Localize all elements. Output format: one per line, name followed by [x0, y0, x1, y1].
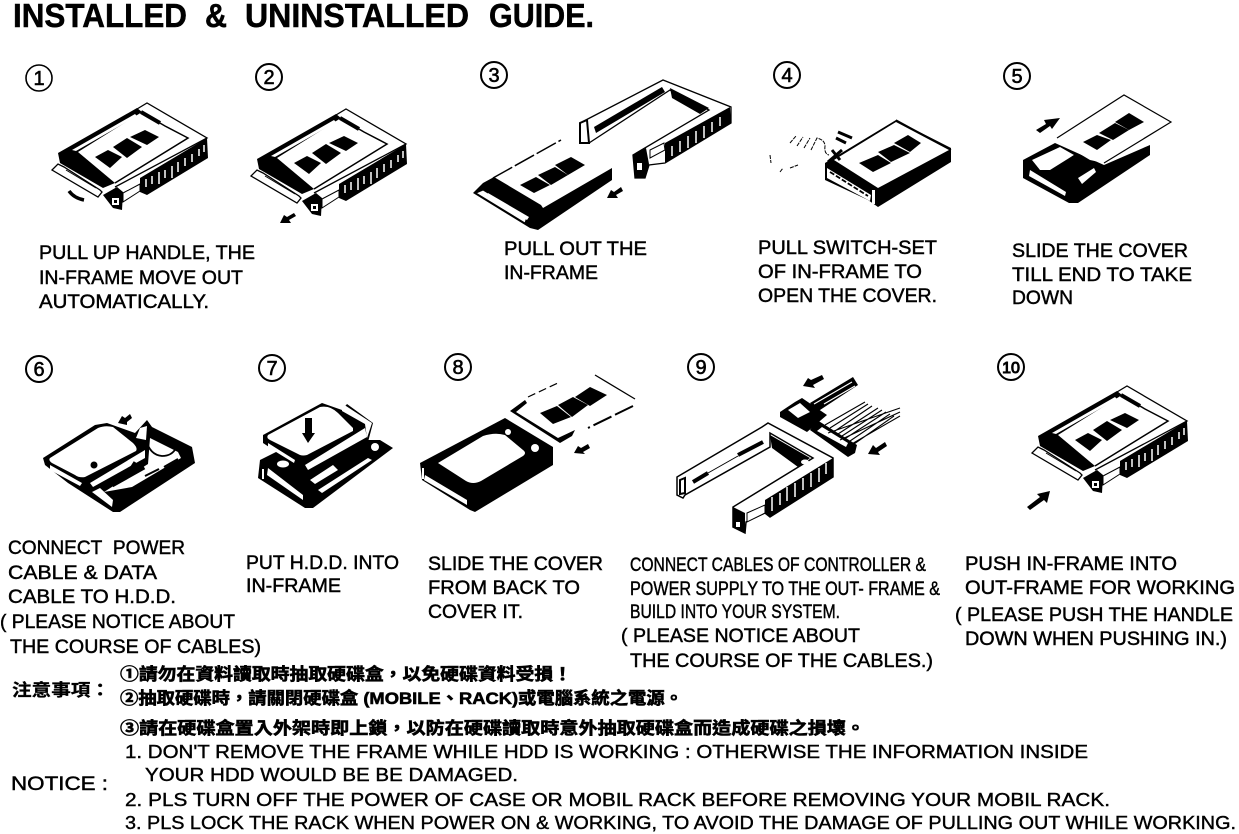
- caption: step 7: IN-FRAME: [246, 576, 341, 597]
- power connector: [780, 377, 858, 432]
- data ribbon: [810, 402, 900, 457]
- step 8 number: [445, 354, 471, 380]
- body: [1023, 143, 1150, 203]
- notice list: English: 3. PLS LOCK THE RACK WHEN POWER ON & WORKING, TO AVOID THE DAMAGE OF PULLING OUT WHILE WORKING.: [125, 813, 1236, 833]
- illustration: step 2 rack pulled out: [251, 109, 407, 223]
- arrow: down: [302, 418, 315, 443]
- caption: step 3: [504, 239, 647, 284]
- step 7 number: [259, 355, 285, 381]
- notice label: English: NOTICE :: [11, 774, 108, 795]
- caption: step 6: [0, 538, 261, 658]
- arrow: power cable: [803, 375, 824, 388]
- caption: step 10: DOWN WHEN PUSHING IN.): [965, 629, 1227, 650]
- illustration: step 8 slide cover back over HDD: [420, 375, 635, 512]
- arrow: slide: [574, 444, 590, 454]
- illustration: step 10 push in-frame into out-frame: [1027, 386, 1188, 510]
- caption: step 9: BUILD INTO YOUR SYSTEM.: [630, 602, 840, 623]
- caption: step 8: COVER IT.: [428, 602, 523, 623]
- caption: step 6: ( PLEASE NOTICE ABOUT: [0, 612, 235, 633]
- caption: step 3: IN-FRAME: [504, 263, 598, 284]
- cover: [1057, 95, 1171, 163]
- caption: step 8: SLIDE THE COVER: [428, 554, 603, 575]
- hand sketch: [770, 136, 829, 172]
- caption: step 10: [955, 554, 1235, 650]
- caption: step 1: [39, 243, 255, 313]
- arrow: handle curve: [69, 191, 84, 200]
- title: [13, 0, 594, 35]
- caption: step 8: [428, 554, 603, 623]
- illustration: step 4 cover opened with switch: [770, 120, 951, 207]
- notice list: English: 1. DON'T REMOVE THE FRAME WHILE HDD IS WORKING : OTHERWISE THE INFORMATION INSIDE: [125, 742, 1088, 762]
- caption: step 9: [621, 555, 940, 672]
- step 3 number: 3: [488, 65, 500, 87]
- caption: step 7: PUT H.D.D. INTO: [246, 553, 399, 574]
- caption: step 6: CABLE TO H.D.D.: [8, 587, 176, 608]
- step 1 number: [26, 65, 52, 91]
- notice list: English: 2. PLS TURN OFF THE POWER OF CASE OR MOBIL RACK BEFORE REMOVING YOUR MOBIL RACK.: [125, 790, 1110, 810]
- step 5 number: [1004, 63, 1030, 89]
- illustration: step 7 HDD into in-frame: [258, 403, 393, 508]
- caption: step 4: PULL SWITCH-SET: [758, 238, 937, 259]
- notice list: Chinese: [120, 664, 865, 738]
- illustration: step 9 cables and out-frame: [677, 375, 900, 533]
- illustration: step 5 cover sliding off: [1023, 95, 1171, 203]
- step 5 number: 5: [1011, 66, 1023, 88]
- caption: step 9: THE COURSE OF THE CABLES.): [630, 651, 933, 672]
- step 1 number: 1: [33, 68, 45, 90]
- caption: step 1: IN-FRAME MOVE OUT: [39, 268, 243, 289]
- arrow: pull out: [280, 213, 296, 223]
- caption: step 10: PUSH IN-FRAME INTO: [965, 554, 1177, 575]
- HDD in frame: [420, 418, 553, 512]
- caption: step 4: OPEN THE COVER.: [758, 286, 937, 307]
- arrow: data cable: [868, 442, 887, 455]
- caption: step 7: [246, 553, 399, 597]
- illustration: step 3 in-frame separated from out-frame: [473, 80, 731, 230]
- notice list: Chinese: ③請在硬碟盒置入外架時即上鎖，以防在硬碟讀取時意外抽取硬碟盒而造成硬碟之損壞。: [120, 718, 865, 738]
- caption: step 6: CABLE & DATA: [8, 563, 157, 584]
- notice list: English: YOUR HDD WOULD BE BE DAMAGED.: [145, 765, 518, 785]
- step 4 number: [774, 62, 800, 88]
- caption: step 10: OUT-FRAME FOR WORKING: [965, 578, 1235, 599]
- step 6 number: [26, 356, 52, 382]
- caption: step 1: AUTOMATICALLY.: [39, 292, 209, 313]
- caption: step 5: TILL END TO TAKE: [1012, 265, 1192, 286]
- caption: step 5: SLIDE THE COVER: [1012, 241, 1188, 262]
- illustration: step 1 rack with handle pulled up: [52, 103, 208, 210]
- step 2 number: 2: [263, 67, 275, 89]
- arrow: pull out in-frame: [607, 187, 623, 198]
- step 2 number: [256, 64, 282, 90]
- illustration: step 6 connect HDD cables: [43, 414, 195, 512]
- step 9 number: [688, 354, 714, 380]
- in-frame under HDD: [258, 440, 393, 508]
- caption: step 8: FROM BACK TO: [428, 578, 580, 599]
- arrow: push in: [1027, 491, 1050, 510]
- caption: step 6: THE COURSE OF CABLES): [10, 637, 261, 658]
- notice list: Chinese: ②抽取硬碟時，請關閉硬碟盒 (MOBILE、RACK)或電腦系統之電源。: [120, 688, 683, 708]
- step 6 number: 6: [33, 359, 45, 381]
- notice label: Chinese: 注意事項：: [12, 680, 110, 700]
- out-frame: [580, 80, 731, 178]
- out-frame: [677, 423, 833, 533]
- caption: step 9: ( PLEASE NOTICE ABOUT: [621, 626, 860, 647]
- HDD: [263, 403, 373, 472]
- caption: step 9: POWER SUPPLY TO THE OUT- FRAME &: [630, 579, 940, 600]
- step 10 number: 10: [1002, 360, 1020, 377]
- notice list: Chinese: ①請勿在資料讀取時抽取硬碟盒，以免硬碟資料受損！: [120, 664, 572, 684]
- caption: step 4: OF IN-FRAME TO: [758, 262, 922, 283]
- step 8 number: 8: [452, 357, 464, 379]
- arrow: slide cover: [1036, 118, 1060, 133]
- caption: step 1: PULL UP HANDLE, THE: [39, 243, 255, 264]
- step 9 number: 9: [695, 357, 707, 379]
- caption: step 10: ( PLEASE PUSH THE HANDLE: [955, 605, 1233, 626]
- cover: [510, 375, 635, 443]
- arrow: switch: [828, 132, 852, 162]
- step 7 number: 7: [266, 358, 278, 380]
- caption: step 9: CONNECT CABLES OF CONTROLLER &: [630, 555, 926, 576]
- caption: step 5: [1012, 241, 1192, 309]
- arrow: connect: [118, 414, 132, 425]
- in-frame: [473, 140, 612, 230]
- step 4 number: 4: [781, 65, 793, 87]
- step 10 number: [998, 354, 1024, 380]
- caption: step 3: PULL OUT THE: [504, 239, 647, 260]
- caption: step 4: [758, 238, 937, 307]
- caption: step 6: CONNECT POWER: [8, 538, 185, 559]
- caption: step 5: DOWN: [1012, 288, 1073, 309]
- notice list: English: [125, 742, 1236, 833]
- step 3 number: [481, 62, 507, 88]
